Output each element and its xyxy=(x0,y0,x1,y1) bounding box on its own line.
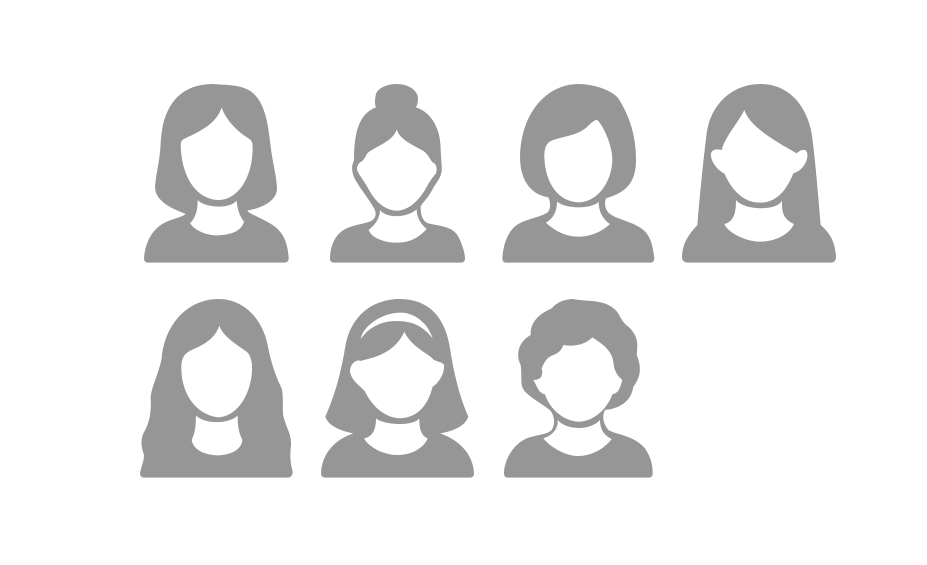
icon: woman with shoulder-length hair xyxy=(144,84,289,263)
icon: woman with headband xyxy=(321,299,474,478)
icon: woman with long wavy hair xyxy=(140,299,293,478)
icon: woman with side-swept bob xyxy=(502,84,654,263)
icon: woman with hair bun xyxy=(330,84,465,263)
icon: woman with short curly hair xyxy=(504,299,653,478)
icon: woman with long straight hair xyxy=(682,84,836,263)
